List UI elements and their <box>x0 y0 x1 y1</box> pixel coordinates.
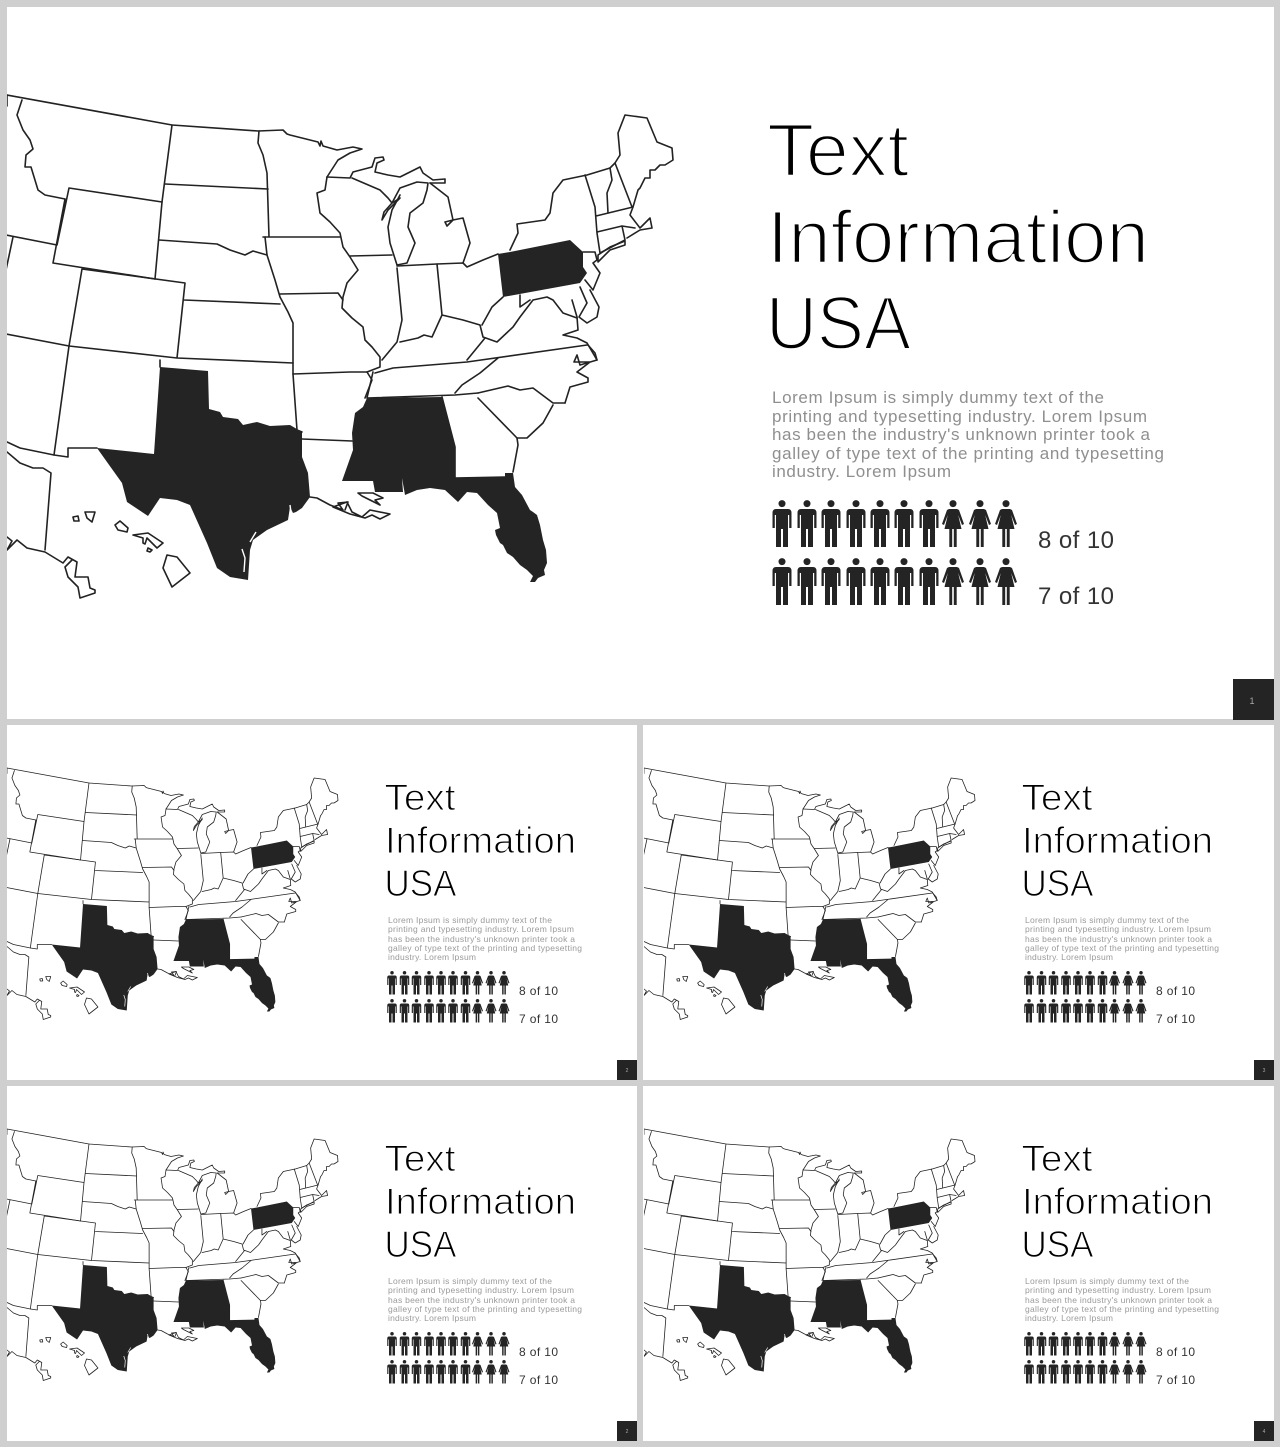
title: Text <box>1022 776 1093 818</box>
USA map with highlighted states <box>6 95 673 598</box>
body text <box>1025 1276 1219 1323</box>
body text: printing and typesetting industry. Lorem Ipsum <box>388 924 574 934</box>
body text: industry. Lorem Ipsum <box>1025 1313 1113 1323</box>
title: Information <box>1022 1180 1213 1222</box>
title: USA <box>1022 1223 1094 1265</box>
page number badge: 4 <box>1263 1429 1266 1435</box>
pictogram row: 7 of 10 <box>387 999 510 1022</box>
panel: slide 4 <box>6 1086 637 1441</box>
pictogram row: 8 of 10 <box>1024 1332 1146 1356</box>
label: 8 of 10: 8 of 10 <box>1156 1345 1195 1359</box>
panel: slide 2 <box>6 725 637 1080</box>
body text: has been the industry's unknown printer took a <box>1025 1295 1212 1305</box>
title: Text <box>384 776 456 818</box>
label: 7 of 10: 7 of 10 <box>1156 1012 1195 1026</box>
body text: printing and typesetting industry. Lorem Ipsum <box>1025 1285 1211 1295</box>
body text: printing and typesetting industry. Lorem Ipsum <box>772 407 1147 426</box>
USA map with highlighted states <box>6 1129 338 1380</box>
body text: has been the industry's unknown printer took a <box>1025 934 1212 944</box>
title: Text <box>1022 1137 1093 1179</box>
body text <box>772 388 1164 481</box>
page number badge <box>1254 1060 1274 1080</box>
body text: galley of type text of the printing and typesetting <box>1025 1304 1219 1314</box>
page number badge: 2 <box>626 1429 629 1435</box>
pictogram row: 7 of 10 <box>1024 1360 1146 1384</box>
pictogram row: 7 of 10 <box>772 558 1017 605</box>
body text: Lorem Ipsum is simply dummy text of the <box>1025 1276 1189 1286</box>
pictogram row: 8 of 10 <box>1024 971 1146 994</box>
label: 7 of 10: 7 of 10 <box>519 1373 558 1387</box>
title: Information <box>767 195 1149 279</box>
page number badge: 2 <box>626 1068 629 1074</box>
title <box>1022 776 1213 904</box>
body text <box>1025 915 1219 962</box>
body text: has been the industry's unknown printer took a <box>388 1295 575 1305</box>
label: 8 of 10: 8 of 10 <box>1038 527 1114 554</box>
page number badge: 3 <box>1263 1068 1266 1074</box>
body text: galley of type text of the printing and typesetting <box>388 1304 582 1314</box>
body text: Lorem Ipsum is simply dummy text of the <box>772 388 1104 407</box>
page number badge: 1 <box>1249 696 1255 706</box>
body text: has been the industry's unknown printer took a <box>772 425 1151 444</box>
body text <box>388 915 582 962</box>
page number badge <box>617 1421 637 1441</box>
body text: Lorem Ipsum is simply dummy text of the <box>388 915 552 925</box>
body text: industry. Lorem Ipsum <box>388 952 476 962</box>
body text <box>388 1276 582 1323</box>
panel: slide 1 (large) <box>6 7 1274 720</box>
body text: Lorem Ipsum is simply dummy text of the <box>388 1276 552 1286</box>
USA map with highlighted states <box>6 768 338 1020</box>
title: Information <box>385 1180 576 1222</box>
page number badge <box>1233 679 1274 720</box>
body text: Lorem Ipsum is simply dummy text of the <box>1025 915 1189 925</box>
title <box>766 108 1149 365</box>
label: 8 of 10: 8 of 10 <box>519 984 558 998</box>
body text: industry. Lorem Ipsum <box>1025 952 1113 962</box>
USA map with highlighted states <box>643 1129 975 1380</box>
title: USA <box>766 281 911 365</box>
title: Information <box>385 819 576 861</box>
pictogram row: 8 of 10 <box>387 971 510 994</box>
page number badge <box>1254 1421 1274 1441</box>
label: 8 of 10: 8 of 10 <box>1156 984 1195 998</box>
body text: galley of type text of the printing and typesetting <box>388 943 582 953</box>
title: Text <box>384 1137 456 1179</box>
label: 7 of 10: 7 of 10 <box>1156 1373 1195 1387</box>
panel: slide 5 <box>643 1086 1274 1441</box>
body text: industry. Lorem Ipsum <box>772 462 951 481</box>
panel: slide 3 <box>643 725 1274 1080</box>
title <box>1022 1137 1213 1265</box>
USA map with highlighted states <box>643 768 975 1020</box>
pictogram row: 7 of 10 <box>387 1360 510 1384</box>
title: Text <box>767 108 909 192</box>
body text: industry. Lorem Ipsum <box>388 1313 476 1323</box>
pictogram row: 8 of 10 <box>772 500 1017 547</box>
title: Information <box>1022 819 1213 861</box>
label: 7 of 10: 7 of 10 <box>1038 583 1114 610</box>
body text: galley of type text of the printing and typesetting <box>772 444 1164 463</box>
pictogram row: 8 of 10 <box>387 1332 510 1356</box>
page number badge <box>617 1060 637 1080</box>
title: USA <box>384 1223 456 1265</box>
title: USA <box>1022 862 1094 904</box>
pictogram row: 7 of 10 <box>1024 999 1146 1022</box>
body text: printing and typesetting industry. Lorem Ipsum <box>388 1285 574 1295</box>
title <box>384 776 576 904</box>
label: 7 of 10: 7 of 10 <box>519 1012 558 1026</box>
body text: galley of type text of the printing and typesetting <box>1025 943 1219 953</box>
body text: has been the industry's unknown printer took a <box>388 934 575 944</box>
title: USA <box>384 862 456 904</box>
label: 8 of 10: 8 of 10 <box>519 1345 558 1359</box>
body text: printing and typesetting industry. Lorem Ipsum <box>1025 924 1211 934</box>
title <box>384 1137 576 1265</box>
